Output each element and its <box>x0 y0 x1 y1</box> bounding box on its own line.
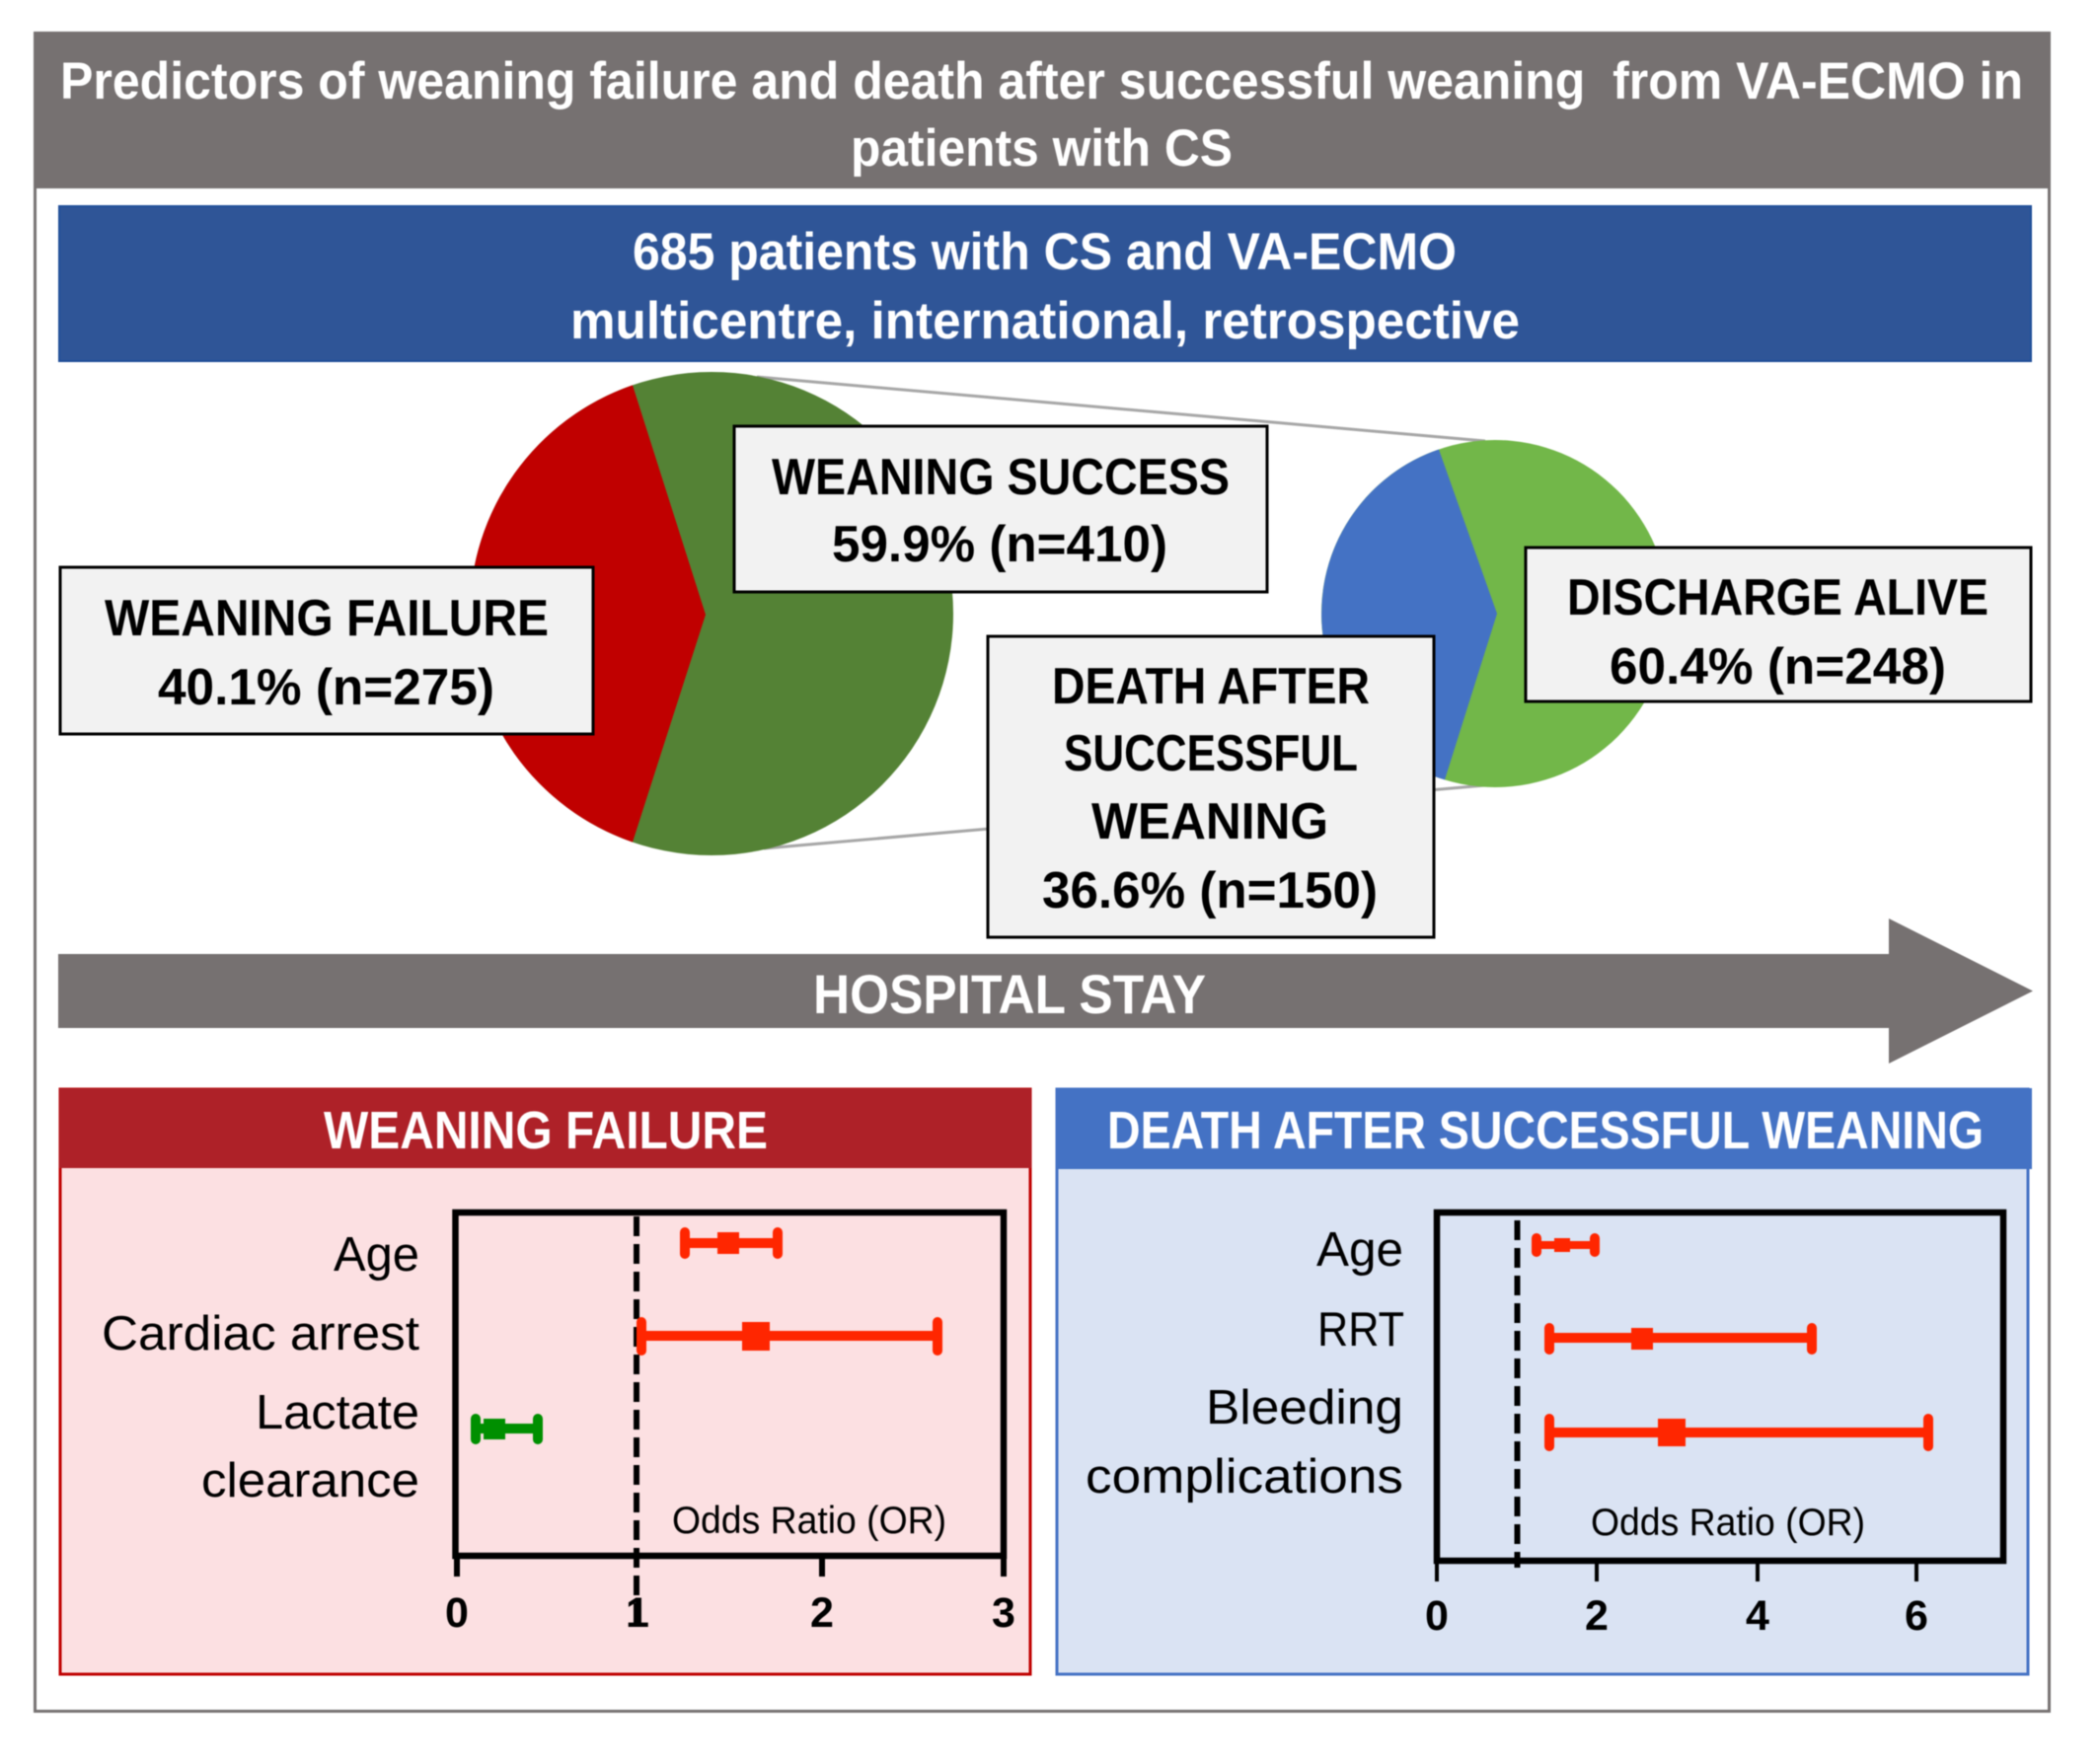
forest plot: weaning failure <box>445 1212 1015 1637</box>
row labels <box>102 1228 419 1507</box>
row labels: complications <box>1086 1450 1403 1504</box>
title banner: patients with CS <box>851 119 1233 178</box>
axis numbers <box>1425 1592 1928 1640</box>
callout: weaning success: WEANING SUCCESS <box>772 449 1230 506</box>
title banner: Predictors of weaning failure and death after successful weaning from VA-ECMO in <box>60 52 2023 110</box>
row labels: Cardiac arrest <box>102 1307 419 1360</box>
callout: discharge alive: 60.4% (n=248) <box>1610 638 1946 696</box>
row labels: Lactate <box>256 1386 419 1439</box>
age odds ratio <box>1532 1233 1600 1257</box>
axis numbers <box>445 1589 1015 1637</box>
callout: weaning failure: 40.1% (n=275) <box>158 659 494 716</box>
axis numbers: 2 <box>810 1589 834 1637</box>
lactate clearance odds ratio <box>471 1414 543 1444</box>
axis title: Odds Ratio (OR) <box>1591 1502 1865 1544</box>
callout: death after successful weaning <box>988 636 1434 937</box>
callout: weaning failure: WEANING FAILURE <box>105 590 549 647</box>
bleeding complications odds ratio <box>1544 1414 1933 1451</box>
RRT odds ratio <box>1544 1323 1817 1355</box>
callout: death after successful weaning: 36.6% (n=150) <box>1042 862 1378 919</box>
panel body <box>60 1089 1030 1674</box>
plot frame and axis ticks <box>456 1212 1004 1577</box>
callout: death after successful weaning: WEANING <box>1091 793 1328 850</box>
panel heading <box>1056 1088 2032 1169</box>
pie chart: weaning outcome <box>470 372 953 855</box>
panel: weaning failure <box>59 1088 1031 1674</box>
study population banner <box>59 206 2031 361</box>
study population banner: 685 patients with CS and VA-ECMO <box>633 223 1457 281</box>
axis numbers: 0 <box>445 1589 469 1637</box>
row labels: Bleeding <box>1206 1381 1403 1434</box>
axis numbers: 4 <box>1746 1592 1769 1640</box>
study population banner: multicentre, international, retrospective <box>570 292 1520 350</box>
pie chart: hospital outcome after weaning <box>1321 440 1669 787</box>
axis numbers: 3 <box>992 1589 1015 1637</box>
callout: death after successful weaning: DEATH AFTER <box>1052 658 1370 715</box>
row labels: RRT <box>1317 1303 1404 1357</box>
plot frame and axis ticks <box>1437 1212 2003 1581</box>
axis numbers: 6 <box>1905 1592 1928 1640</box>
panel heading: WEANING FAILURE <box>324 1101 768 1160</box>
callout: discharge alive <box>1526 548 2031 701</box>
panel heading <box>59 1088 1031 1168</box>
axis numbers: 0 <box>1425 1592 1449 1640</box>
panel: death after successful weaning <box>1056 1088 2032 1674</box>
axis numbers: 1 <box>626 1589 649 1637</box>
pie connector lines <box>757 377 1485 848</box>
panel body <box>1057 1089 2028 1674</box>
axis numbers: 2 <box>1585 1592 1609 1640</box>
reference line at OR 1 <box>634 1216 639 1630</box>
row labels: Age <box>334 1228 419 1282</box>
title banner <box>35 33 2050 188</box>
forest plot: death after successful weaning <box>1425 1212 2003 1640</box>
panel heading: DEATH AFTER SUCCESSFUL WEANING <box>1107 1101 1984 1160</box>
callout: discharge alive: DISCHARGE ALIVE <box>1567 569 1988 626</box>
row labels: clearance <box>201 1454 419 1507</box>
callout: weaning failure <box>60 567 593 734</box>
callout: weaning success <box>734 426 1267 592</box>
axis title: Odds Ratio (OR) <box>672 1500 946 1542</box>
arrow: hospital stay: HOSPITAL STAY <box>813 963 1206 1025</box>
row labels: Age <box>1316 1223 1403 1277</box>
reference line at OR 1 <box>1514 1220 1520 1568</box>
cardiac arrest odds ratio <box>637 1317 942 1356</box>
callout: death after successful weaning: SUCCESSFUL <box>1064 725 1358 782</box>
row labels <box>1086 1223 1404 1504</box>
arrow: hospital stay <box>58 918 2033 1064</box>
callout: weaning success: 59.9% (n=410) <box>832 516 1167 573</box>
age odds ratio <box>680 1227 783 1259</box>
